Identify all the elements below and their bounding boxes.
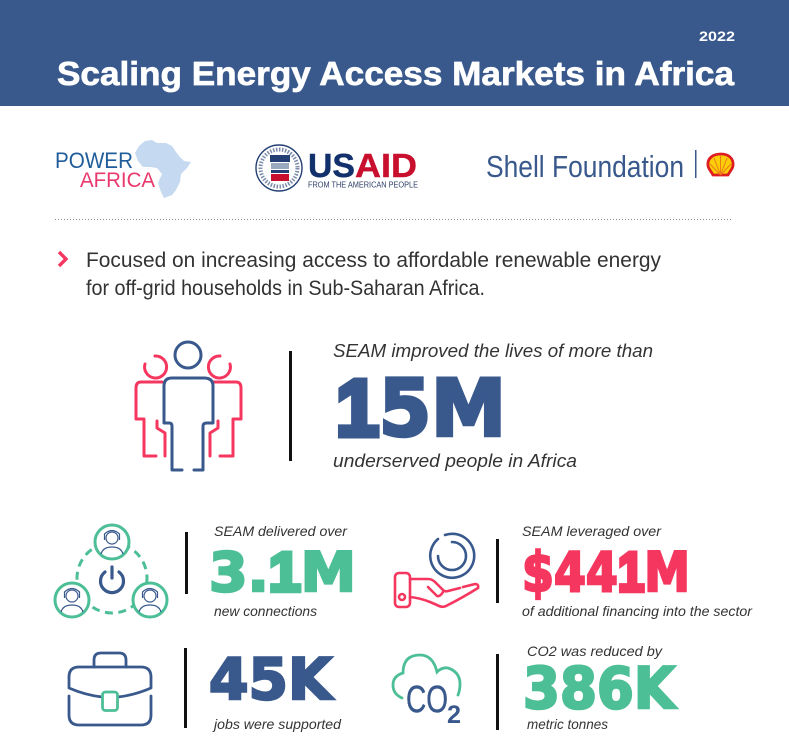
stat: $441M — [522, 523, 753, 619]
header banner — [0, 0, 789, 106]
icon: CO2 cloud — [393, 655, 461, 729]
stat: 45K: 45K — [209, 647, 334, 713]
stat: 386K: CO2 was reduced by — [527, 643, 663, 659]
icon: group of people — [136, 342, 241, 470]
stat: 15M: underserved people in Africa — [333, 450, 577, 471]
icon: connected network — [55, 525, 167, 617]
icon: Africa map — [135, 140, 191, 198]
intro text: Focused on increasing access to affordable renewable energy — [86, 249, 661, 272]
divider — [185, 532, 188, 594]
logo: USAID: US — [308, 147, 355, 184]
logo: USAID — [256, 145, 418, 191]
logo: Power Africa: AFRICA — [80, 169, 155, 192]
logo: USAID: FROM THE AMERICAN PEOPLE — [308, 180, 418, 190]
divider — [184, 648, 187, 728]
dotted divider — [55, 218, 733, 220]
stat: 3.1M: SEAM delivered over — [214, 523, 348, 539]
stat: $441M: SEAM leveraged over — [522, 523, 662, 539]
logo: Power Africa: POWER — [55, 148, 133, 173]
logo: Shell Foundation: Shell Foundation — [486, 149, 684, 184]
intro text — [59, 249, 661, 300]
divider — [289, 351, 292, 461]
stat: $441M: of additional financing into the sector — [522, 603, 753, 619]
stat: 3.1M: 3.1M — [209, 540, 356, 604]
icon: chevron — [59, 252, 66, 266]
stat: 15M: SEAM improved the lives of more than — [333, 340, 653, 361]
icon: Shell pecten — [708, 154, 733, 175]
stat: 15M: 15M — [336, 364, 506, 454]
stat: 386K: metric tonnes — [527, 716, 608, 732]
icon: CO2 cloud: 2 — [447, 701, 461, 729]
stat: $441M: $441M — [522, 540, 690, 604]
stat: 3.1M — [209, 523, 356, 619]
icon: CO2 cloud: CO — [406, 679, 448, 721]
stat: 386K: 386K — [523, 656, 677, 722]
stat: 3.1M: new connections — [214, 603, 317, 619]
icon: hand with coin — [395, 534, 478, 607]
stat: 45K: jobs were supported — [212, 716, 342, 732]
briefcase clasp — [102, 692, 118, 710]
stat: 15M — [333, 340, 653, 471]
divider — [496, 654, 499, 730]
divider — [496, 539, 499, 603]
icon: briefcase — [69, 653, 151, 725]
intro text: for off-grid households in Sub-Saharan Africa. — [86, 277, 485, 300]
year label: 2022 — [699, 29, 735, 44]
logo: USAID: AID — [355, 147, 417, 184]
logo: Power Africa — [55, 140, 191, 198]
title: Scaling Energy Access Markets in Africa — [57, 56, 734, 93]
icon: USAID seal — [256, 145, 302, 191]
